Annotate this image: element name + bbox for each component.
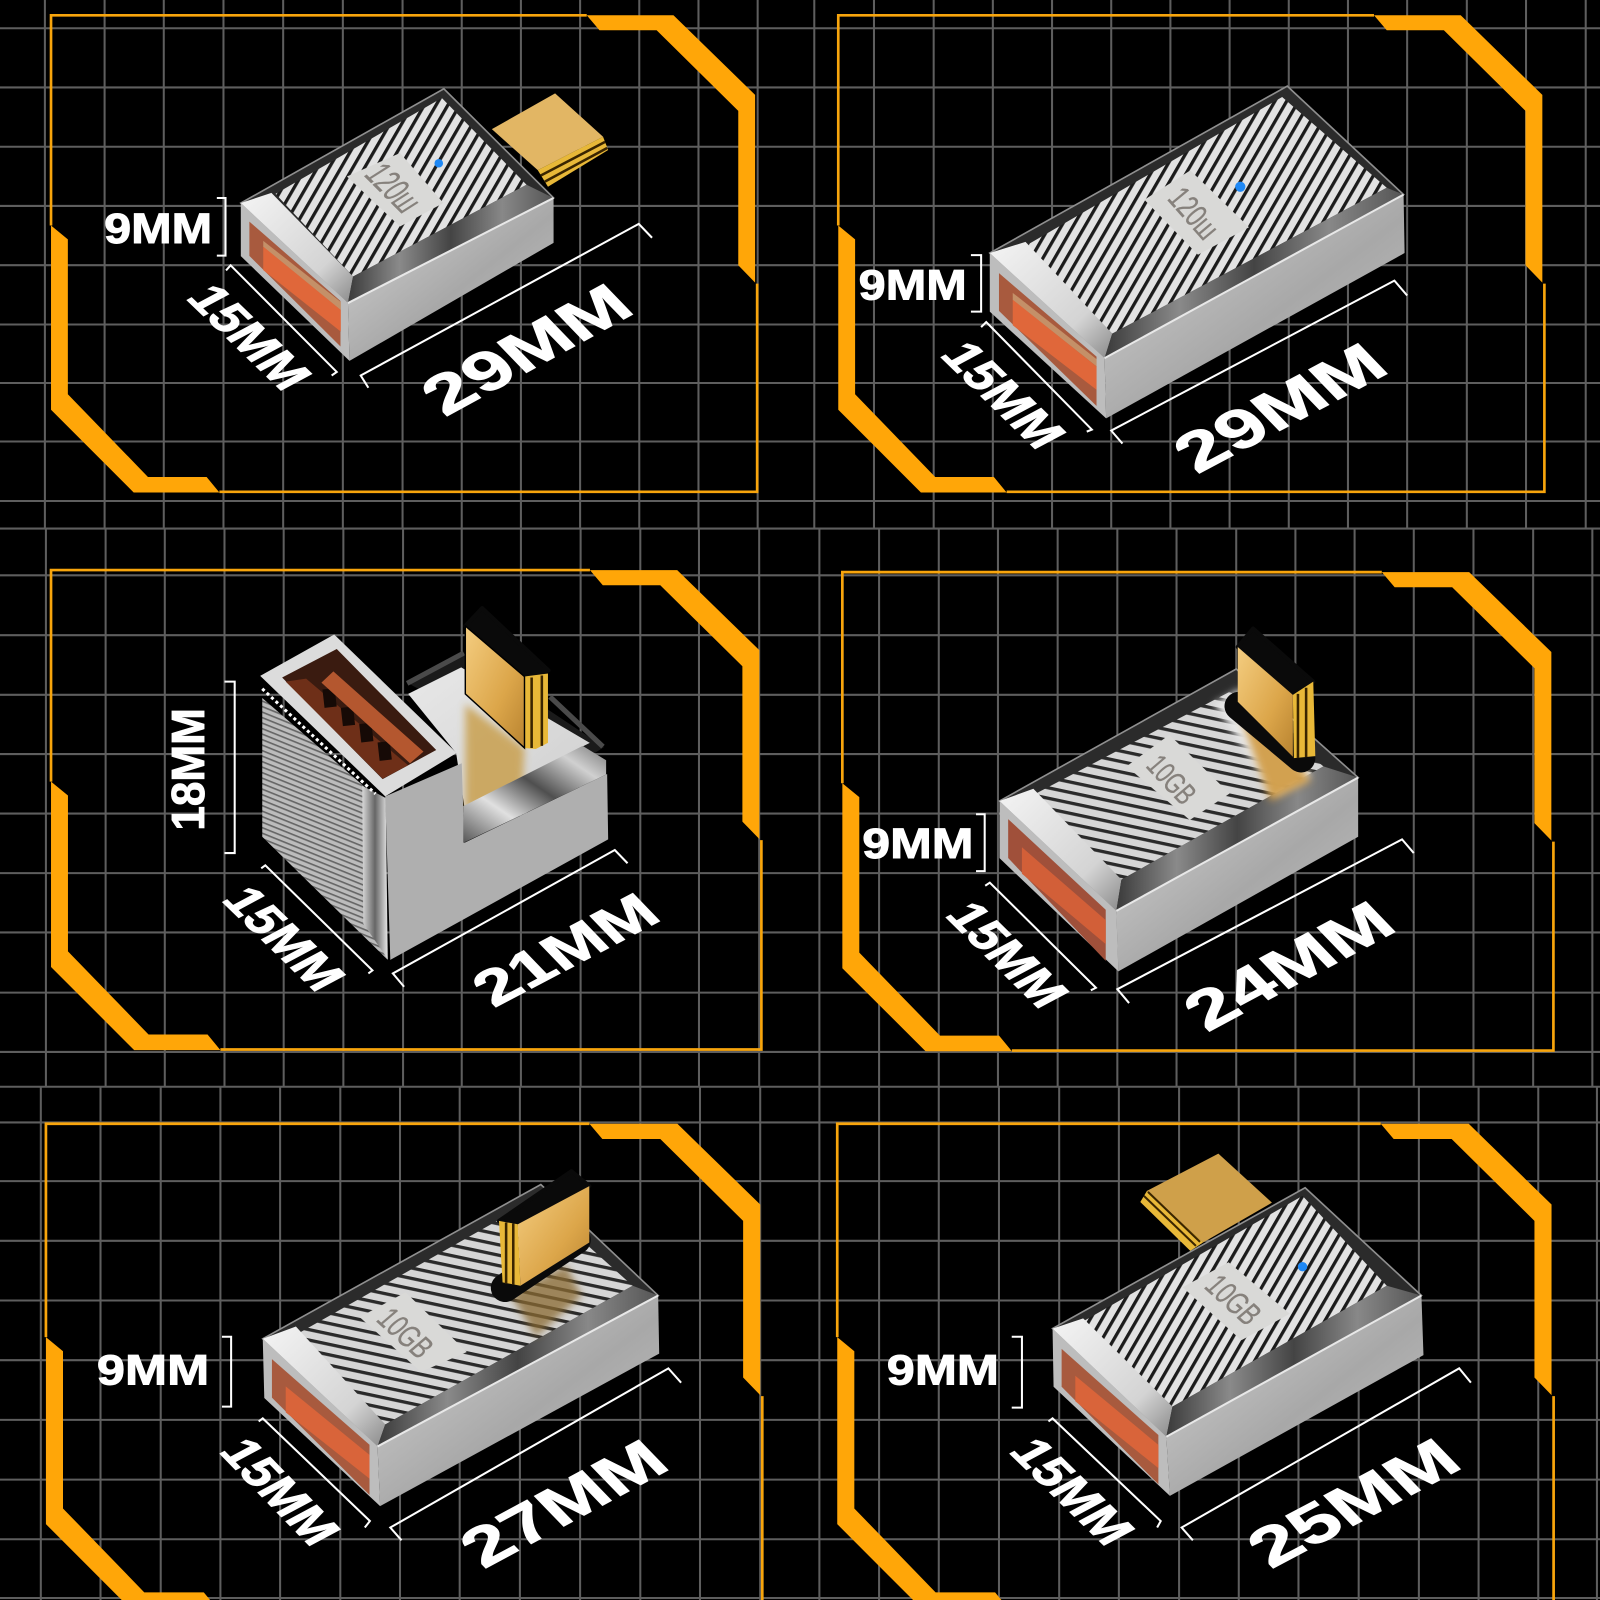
blue indicator dot [434, 159, 443, 168]
label: 10GB: 10GB [370, 1301, 442, 1365]
dimension 9MM [859, 255, 981, 312]
dimension 15MM: 15MM [934, 894, 1081, 1015]
dimension 24MM [1117, 839, 1414, 1042]
panel: 29mm straight adapter 120W (top right) [838, 15, 1544, 492]
dimension 25MM [1182, 1368, 1474, 1579]
dimension 9MM: 9MM [859, 262, 967, 310]
label: 120W: 120ш [356, 157, 431, 219]
orange frame [46, 1124, 762, 1600]
dimension 9MM: 9MM [862, 820, 973, 868]
dimension 24MM: 24MM [1169, 890, 1409, 1042]
orange frame [837, 1124, 1554, 1600]
blue indicator dot [1298, 1262, 1307, 1271]
panel: 29mm right-angle adapter 120W (top left) [51, 15, 757, 492]
dimension 15MM: 15MM [929, 333, 1078, 456]
panel: 21mm vertical L-shaped adapter (middle left) [51, 570, 761, 1050]
dimension 15MM: 15MM [211, 878, 358, 999]
orange frame [838, 15, 1544, 492]
dimension 15MM: 15MM [998, 1430, 1147, 1553]
dimension 9MM [104, 198, 226, 256]
dimension 25MM: 25MM [1233, 1427, 1474, 1579]
dimension 18MM: 18MM [162, 708, 214, 831]
USB-A port [282, 649, 436, 779]
dimension 9MM [862, 814, 985, 871]
orange frame [51, 570, 761, 1050]
orange frame [51, 15, 757, 492]
dimension 9MM: 9MM [104, 205, 212, 253]
dimension 9MM [887, 1337, 1022, 1408]
orange frame [842, 572, 1553, 1051]
adapter body [241, 89, 554, 361]
gold USB-C connector [465, 608, 548, 749]
panel: 25mm adapter 10GB (bottom right) [837, 1124, 1554, 1600]
dimension 9MM: 9MM [97, 1347, 209, 1395]
dimension 21MM: 21MM [458, 882, 672, 1017]
gold USB-C connector [1140, 1154, 1272, 1251]
adapter body [260, 634, 608, 960]
dimension 18MM [162, 682, 235, 853]
dimension 29MM [1111, 281, 1407, 484]
panel: 24mm adapter 10GB (middle right) [842, 572, 1553, 1051]
dimension 29MM: 29MM [407, 272, 646, 427]
dimension 9MM: 9MM [887, 1347, 999, 1395]
adapter body [990, 86, 1405, 418]
gold USB-C connector [499, 1171, 589, 1288]
dimension 21MM [393, 850, 672, 1017]
label: 10GB: 10GB [1198, 1268, 1270, 1331]
gold USB-C connector [492, 93, 608, 187]
adapter body [263, 1184, 659, 1506]
label: 120W: 120ш [1161, 180, 1227, 246]
dimension 29MM: 29MM [1159, 332, 1401, 484]
label: 10GB: 10GB [1140, 749, 1203, 811]
adapter body [1053, 1188, 1423, 1496]
blue indicator dot [1235, 182, 1245, 192]
panel: 27mm adapter 10GB (bottom left) [46, 1124, 762, 1600]
dimension 29MM [361, 224, 652, 427]
dimension 27MM [390, 1368, 681, 1579]
dimension 27MM: 27MM [445, 1428, 681, 1579]
dimension 15MM: 15MM [208, 1430, 352, 1553]
adapter body [999, 669, 1358, 971]
dimension 9MM [97, 1337, 231, 1407]
gold USB-C connector [1238, 629, 1315, 758]
dimension 15MM: 15MM [175, 276, 324, 398]
